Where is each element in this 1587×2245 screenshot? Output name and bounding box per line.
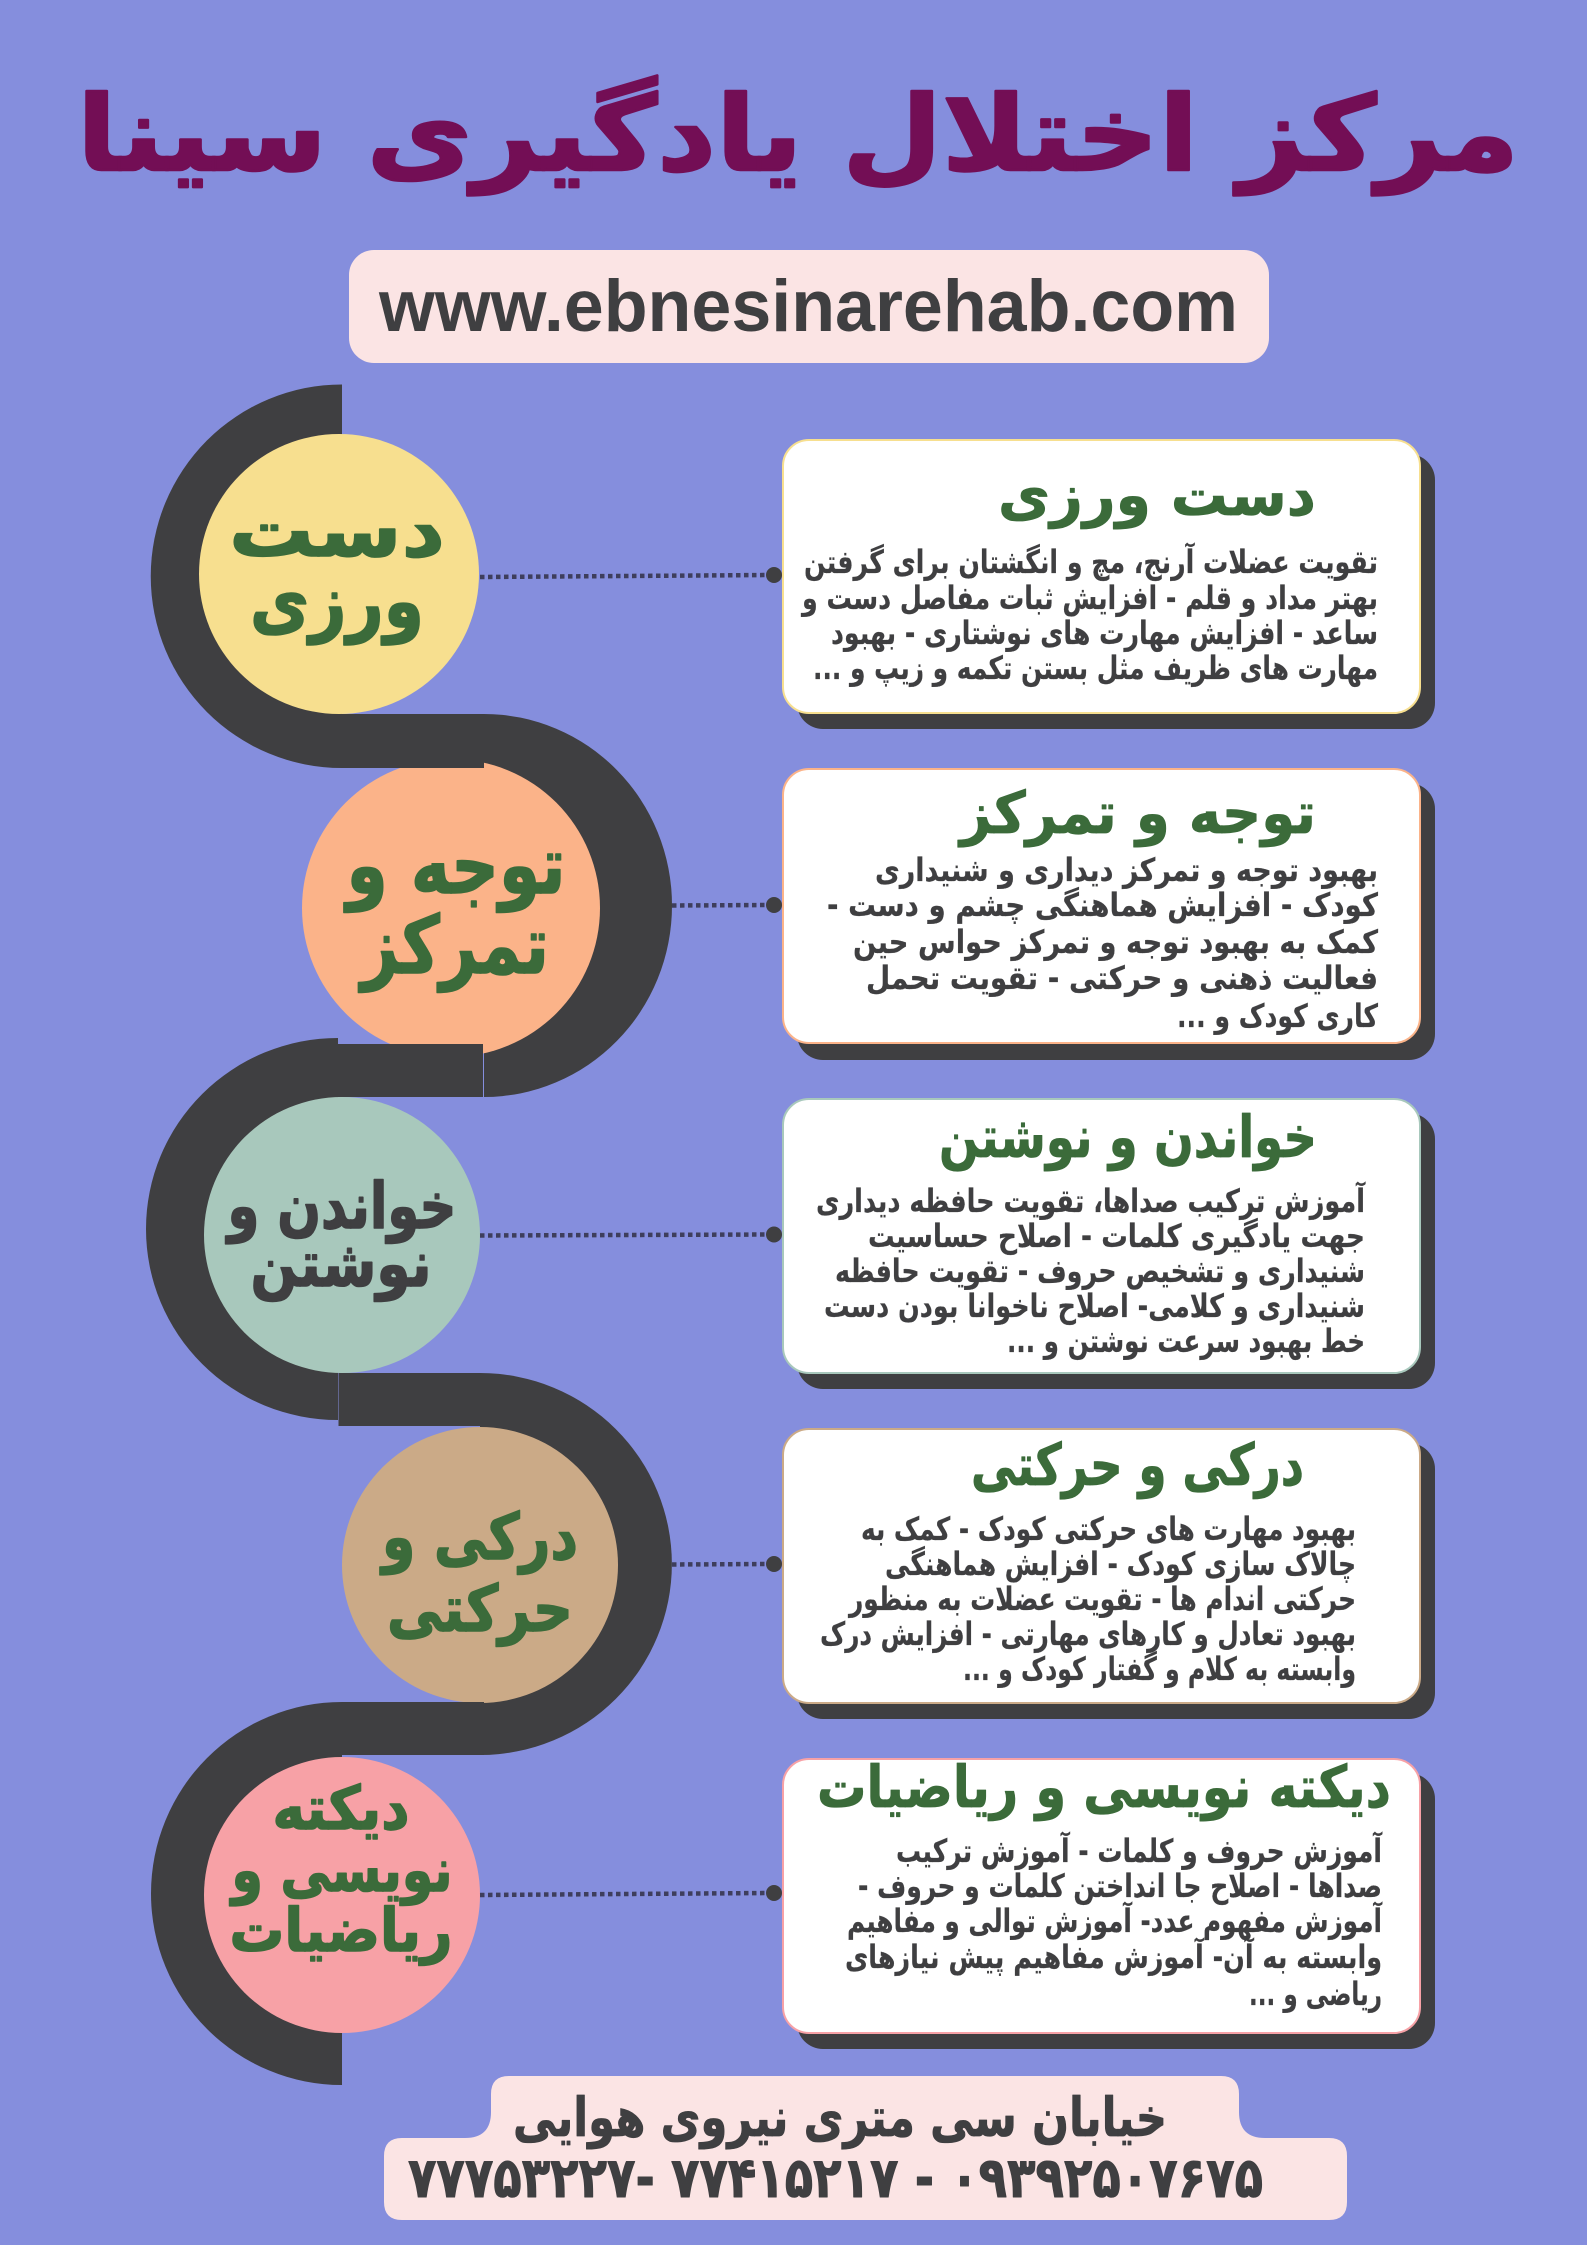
curve 5: [151, 1702, 342, 2085]
panel: card 1 hand skills: تقویت عضلات آرنج، مچ و انگشتان برای گرفتن: [804, 542, 1378, 581]
panel: card 1 hand skills: [783, 440, 1435, 729]
panel: card 5 dictation and math: صداها - اصلاح جا انداختن کلمات و حروف -: [858, 1867, 1382, 1905]
dotted connector 5: [480, 1885, 782, 1901]
dotted connector 2: [672, 897, 782, 913]
circle 3: teal: خواندن و: [225, 1170, 456, 1244]
website pill: [349, 250, 1269, 363]
circle 4: tan: [342, 1427, 618, 1703]
footer contact pill: [384, 2076, 1347, 2220]
serpentine path and step circles: [146, 384, 672, 2085]
curve 1: [151, 384, 342, 768]
panel: card 3 reading and writing: خط بهبود سرعت نوشتن و ...: [1007, 1322, 1365, 1360]
panel: card 2 attention: فعالیت ذهنی و حرکتی - تقویت تحمل: [866, 959, 1378, 997]
panel: card 4 perceptual motor: [783, 1429, 1435, 1719]
circle 2: peach: تمرکز: [358, 899, 549, 993]
panel: card 1 hand skills: دست ورزی: [998, 461, 1316, 530]
panel: card 4 perceptual motor: درکی و حرکتی: [971, 1431, 1304, 1500]
circle 4: tan: حرکتی: [387, 1573, 573, 1647]
panel: card 5 dictation and math: آموزش مفهوم عدد- آموزش توالی و مفاهیم: [847, 1901, 1383, 1940]
circle 1: yellow: [199, 434, 479, 714]
circle 5: pink: دیکته: [272, 1774, 410, 1844]
circle 5: pink: نویسی و: [229, 1836, 452, 1906]
panel: card 3 reading and writing: شنیداری و تشخیص حروف - تقویت حافظه: [835, 1252, 1365, 1290]
circle 5: pink: [204, 1757, 480, 2033]
panel: card 2 attention: کاری کودک و ...: [1177, 997, 1378, 1035]
panel: card 2 attention: کمک به بهبود توجه و تمرکز حواس حین: [853, 923, 1378, 961]
phone numbers: ۷۷۷۵۳۲۲۷- ۷۷۴۱۵۲۱۷ - ۰۹۳۹۲۵۰۷۶۷۵: [408, 2146, 1263, 2211]
circle 5: pink: ریاضیات: [230, 1896, 452, 1966]
panel: card 2 attention: بهبود توجه و تمرکز دیداری و شنیداری: [875, 851, 1378, 889]
panel: card 2 attention: کودک - افزایش هماهنگی چشم و دست -: [827, 886, 1378, 924]
circle 4: tan: درکی و: [379, 1501, 578, 1575]
curve 2: [484, 714, 672, 1097]
circle 2: peach: توجه و: [343, 819, 566, 913]
connector band 4: [342, 1702, 484, 1755]
panel: card 5 dictation and math: ریاضی و ...: [1249, 1975, 1382, 2013]
website pill: www.ebnesinarehab.com: [378, 266, 1238, 347]
panel: card 4 perceptual motor: وابسته به کلام و گفتار کودک و ...: [963, 1650, 1356, 1688]
panel: card 5 dictation and math: آموزش حروف و کلمات - آموزش ترکیب: [896, 1831, 1383, 1870]
panel: card 3 reading and writing: شنیداری و کلامی- اصلاح ناخوانا بودن دست: [824, 1287, 1365, 1325]
panel: card 4 perceptual motor: بهبود مهارت های حرکتی کودک - کمک به: [861, 1510, 1356, 1548]
panel: card 4 perceptual motor: بهبود تعادل و کارهای مهارتی - افزایش درک: [820, 1615, 1356, 1653]
dotted connector 1: [480, 567, 782, 583]
panel: card 2 attention: [783, 769, 1435, 1060]
curve 4: [480, 1373, 672, 1755]
connector band 3: [338, 1373, 480, 1426]
panel: card 5 dictation and math: دیکته نویسی و ریاضیات: [817, 1753, 1391, 1822]
panel: card 5 dictation and math: [783, 1753, 1435, 2049]
panel: card 4 perceptual motor: چالاک سازی کودک - افزایش هماهنگی: [885, 1545, 1356, 1583]
panel: card 3 reading and writing: خواندن و نوشتن: [939, 1103, 1317, 1172]
address: خیابان سی متری نیروی هوایی: [513, 2086, 1167, 2149]
panel: card 4 perceptual motor: حرکتی اندام ها - تقویت عضلات به منظور: [847, 1580, 1356, 1618]
title: مرکز اختلال یادگیری سینا: [77, 73, 1519, 195]
circle 1: yellow: دست: [229, 488, 445, 574]
circle 2: peach: [302, 759, 600, 1057]
panel: card 1 hand skills: مهارت های ظریف مثل بستن تکمه و زیپ و ...: [813, 649, 1378, 687]
panel: card 3 reading and writing: [783, 1099, 1435, 1389]
panel: card 3 reading and writing: جهت یادگیری کلمات - اصلاح حساسیت: [868, 1217, 1365, 1255]
panel: card 5 dictation and math: وابسته به آن- آموزش مفاهیم پیش نیازهای: [845, 1937, 1382, 1976]
connector band 1: [342, 714, 484, 768]
circle 3: teal: [204, 1097, 480, 1373]
connector band 2: [338, 1044, 483, 1097]
curve 3: [146, 1038, 338, 1420]
panel: card 2 attention: توجه و تمرکز: [957, 779, 1316, 848]
dotted connector 4: [672, 1556, 782, 1572]
dotted connector 3: [480, 1226, 782, 1242]
circle 3: teal: نوشتن: [250, 1228, 432, 1302]
circle 1: yellow: ورزی: [250, 559, 424, 646]
panel: card 1 hand skills: ساعد - افزایش مهارت های نوشتاری - بهبود: [831, 614, 1378, 652]
panel: card 1 hand skills: بهتر مداد و قلم - افزایش ثبات مفاصل دست و: [800, 579, 1378, 617]
panel: card 3 reading and writing: آموزش ترکیب صداها، تقویت حافظه دیداری: [816, 1181, 1366, 1220]
